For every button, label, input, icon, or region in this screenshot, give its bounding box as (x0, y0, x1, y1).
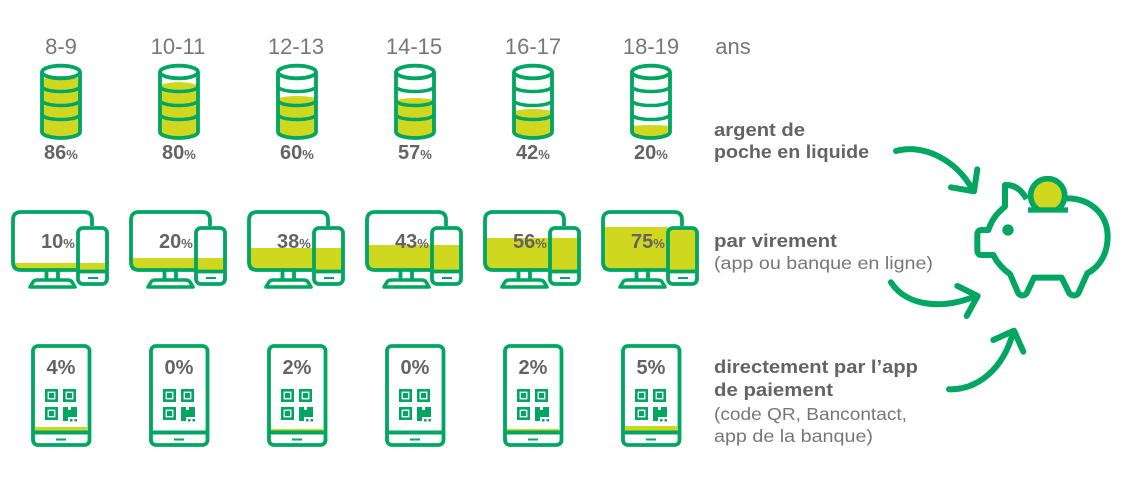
coins 8-9: 86% (44, 142, 78, 164)
label: payment app (714, 357, 918, 446)
mobile 16-17: 2% (518, 357, 548, 379)
devices 12-13 (249, 212, 343, 287)
label: payment app: de paiement (714, 380, 833, 400)
label: payment app: app de la banque) (714, 426, 873, 446)
age header row: 14-15 (386, 34, 442, 59)
label: payment app: (code QR, Bancontact, (714, 404, 907, 424)
age header row: 10-11 (151, 34, 205, 59)
age header row: 12-13 (268, 34, 324, 59)
devices 10-11: 20% (159, 231, 193, 253)
coins 12-13: 60% (280, 142, 314, 164)
mobile 14-15 (387, 346, 444, 445)
devices 16-17: 56% (513, 231, 547, 253)
age header row: 8-9 (45, 34, 77, 59)
label: cash pocket money (714, 120, 869, 162)
coins 12-13 (278, 66, 316, 164)
coins 10-11 (160, 66, 198, 164)
mobile 12-13 (269, 346, 326, 445)
label: cash pocket money: poche en liquide (714, 142, 869, 162)
mobile 10-11: 0% (164, 357, 194, 379)
mobile 14-15: 0% (400, 357, 430, 379)
devices 8-9 (13, 212, 107, 287)
mobile 16-17 (505, 346, 562, 445)
devices 10-11 (131, 212, 225, 287)
coins 16-17: 42% (516, 142, 550, 164)
mobile 18-19 (623, 346, 680, 445)
coins 10-11: 80% (162, 142, 196, 164)
coins 14-15 (396, 66, 434, 164)
label: bank transfer: (app ou banque en ligne) (714, 253, 933, 273)
age header row (45, 34, 751, 59)
mobile 12-13: 2% (282, 357, 312, 379)
age header row: ans (715, 34, 751, 59)
devices 8-9: 10% (41, 231, 75, 253)
mobile 8-9 (33, 346, 90, 445)
devices 14-15 (367, 212, 461, 287)
devices 12-13: 38% (277, 231, 311, 253)
age header row: 16-17 (505, 34, 561, 59)
label: bank transfer (714, 231, 933, 273)
icon: piggy bank with coin (977, 179, 1108, 295)
label: payment app: directement par l’app (714, 357, 918, 377)
label: bank transfer: par virement (714, 231, 837, 251)
devices 18-19: 75% (631, 231, 665, 253)
mobile 10-11 (151, 346, 208, 445)
devices 14-15: 43% (395, 231, 429, 253)
arrow: app to piggy (949, 331, 1023, 389)
arrow: cash to piggy (896, 149, 977, 191)
mobile 8-9: 4% (46, 357, 76, 379)
devices 16-17 (485, 212, 579, 287)
arrow: transfer to piggy (891, 282, 978, 316)
devices 18-19 (603, 212, 697, 287)
coins 18-19 (632, 66, 670, 164)
coins 8-9 (42, 66, 80, 164)
age header row: 18-19 (623, 34, 679, 59)
coins 14-15: 57% (398, 142, 432, 164)
coins 16-17 (514, 66, 552, 164)
mobile 18-19: 5% (636, 357, 666, 379)
label: cash pocket money: argent de (714, 120, 805, 140)
coins 18-19: 20% (634, 142, 668, 164)
